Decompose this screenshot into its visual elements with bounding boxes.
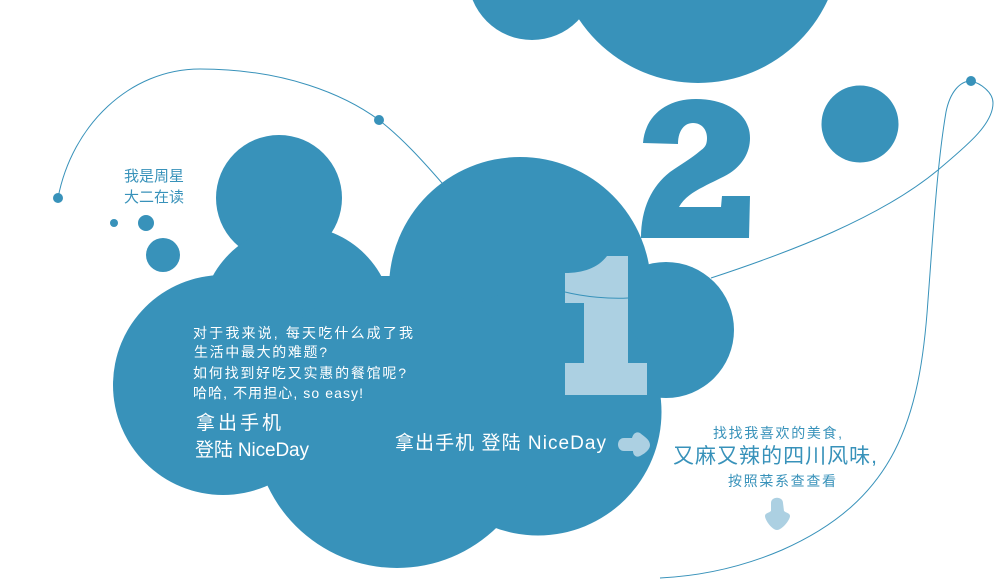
- paragraph: daily meal problem: 对于我来说, 每天吃什么成了我: [193, 325, 413, 341]
- text: find favourite food: 按照菜系查查看: [728, 473, 836, 489]
- connector line across numeral 1: [565, 292, 628, 298]
- dots on connector lines: [53, 76, 976, 203]
- intro text: [124, 168, 184, 206]
- call to action: center: 拿出手机 登陆 NiceDay: [395, 431, 606, 454]
- text: find favourite food: [673, 425, 877, 489]
- arrow: down: [765, 498, 790, 530]
- top clouds: [468, 0, 841, 83]
- main cloud: [113, 135, 734, 568]
- text: find favourite food: 找找我喜欢的美食,: [713, 425, 842, 441]
- numeral 1: [565, 256, 647, 395]
- call to action: left: 拿出手机: [196, 411, 281, 434]
- arrow: right: [618, 432, 650, 457]
- connector line: left arc: [58, 69, 442, 198]
- paragraph: daily meal problem: 哈哈, 不用担心, so easy!: [193, 385, 363, 401]
- call to action: left: [195, 411, 310, 461]
- paragraph: daily meal problem: 如何找到好吃又实惠的餐馆呢?: [193, 365, 406, 381]
- call to action: left: 登陆 NiceDay: [195, 439, 310, 461]
- intro text: 我是周星: [124, 168, 184, 185]
- numeral 2: [641, 99, 750, 238]
- text: find favourite food: 又麻又辣的四川风味,: [673, 445, 877, 468]
- paragraph: daily meal problem: 生活中最大的难题?: [194, 344, 327, 360]
- paragraph: daily meal problem: [193, 325, 413, 401]
- connector line: right loop: [660, 81, 993, 578]
- decorative bubbles: [110, 215, 180, 272]
- intro text: 大二在读: [124, 189, 184, 206]
- circle: upper right: [822, 86, 898, 162]
